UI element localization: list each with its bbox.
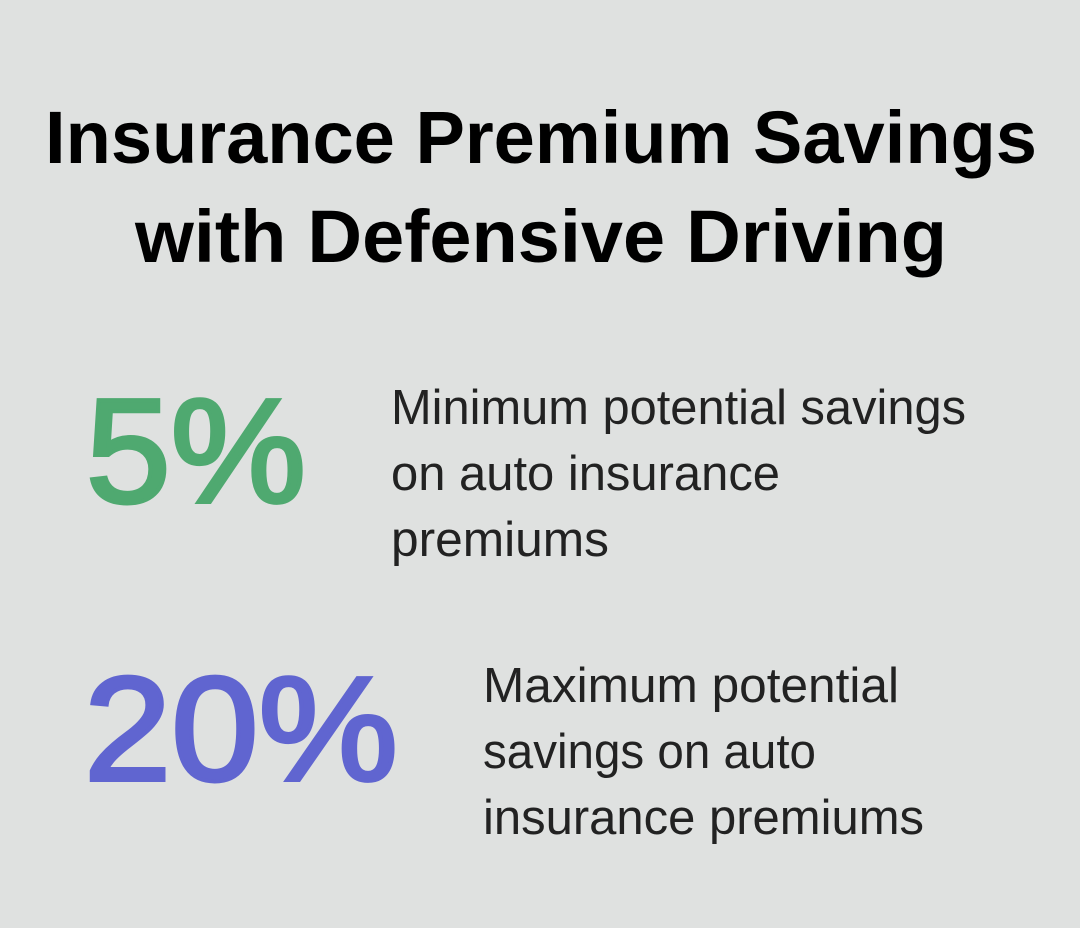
description: minimum savings	[391, 381, 966, 567]
title: Insurance Premium Savings	[45, 96, 1037, 179]
description: maximum savings: Maximum potential	[483, 659, 899, 713]
stat: 5% minimum savings	[86, 369, 966, 567]
description: minimum savings: Minimum potential savings	[391, 381, 966, 435]
description: minimum savings: premiums	[391, 513, 609, 567]
big number: 5%: 5%	[86, 369, 306, 534]
title: with Defensive Driving	[134, 195, 947, 278]
title	[45, 96, 1037, 278]
description: maximum savings	[483, 659, 924, 845]
description: minimum savings: on auto insurance	[391, 447, 780, 501]
description: maximum savings: insurance premiums	[483, 791, 924, 845]
stat: 20% maximum savings	[84, 647, 924, 845]
description: maximum savings: savings on auto	[483, 725, 816, 779]
big number: 20%: 20%	[84, 647, 398, 812]
